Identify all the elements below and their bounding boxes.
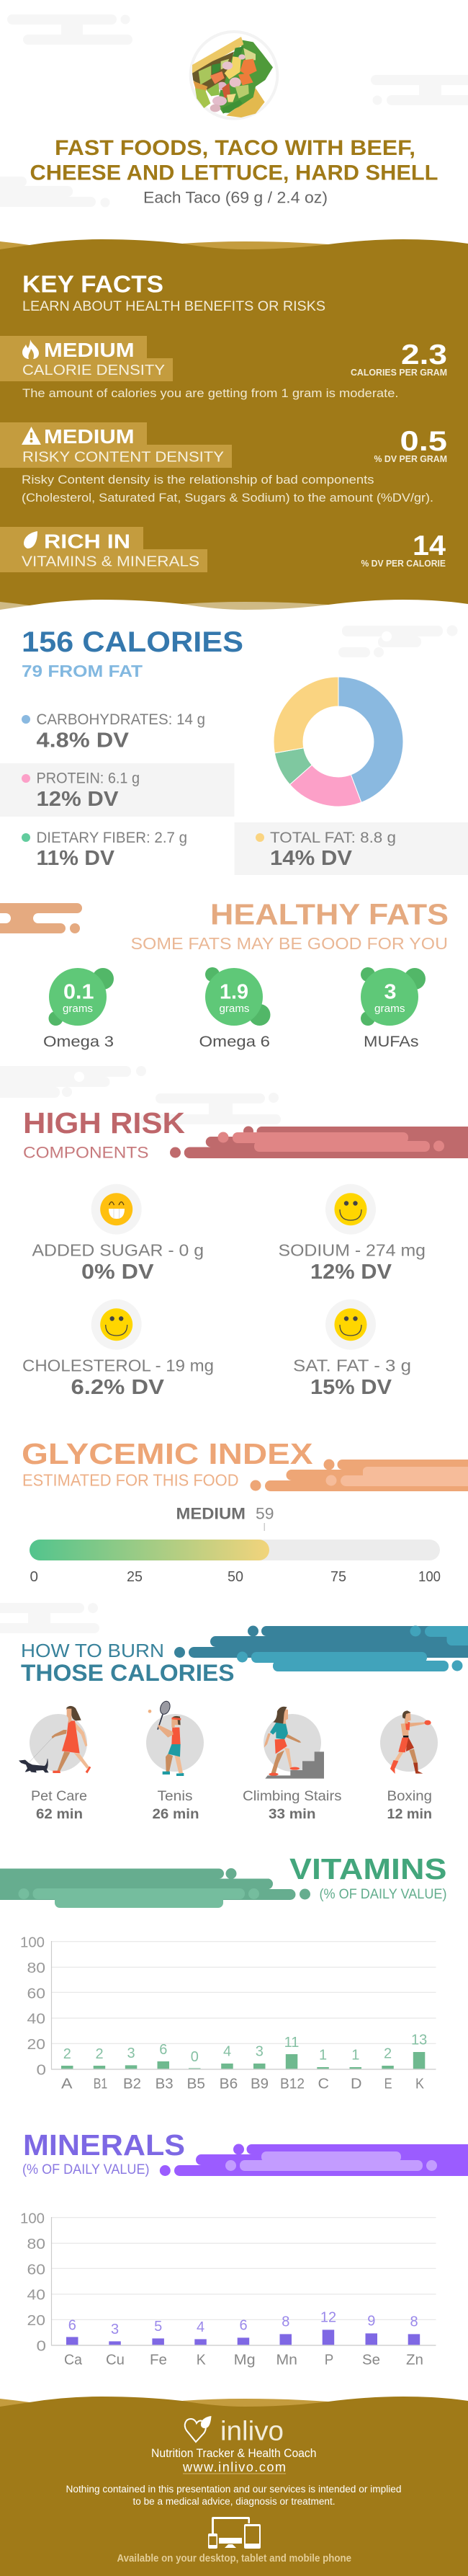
y axis labels <box>20 1935 46 2079</box>
x axis labels: Zn <box>406 2353 423 2368</box>
icon: flame <box>22 339 39 359</box>
y axis labels: 80 <box>27 1960 45 1976</box>
activity: tennis: 26 min <box>153 1806 199 1822</box>
icon: smiling face <box>334 1308 367 1341</box>
bar value labels: 12 <box>320 2310 336 2326</box>
stat: omega 6 <box>199 967 271 1050</box>
bars <box>61 2052 425 2069</box>
heading: vitamins: VITAMINS <box>289 1852 446 1886</box>
x axis labels: B2 <box>123 2076 141 2092</box>
availability note: Available on your desktop, tablet and mobile phone <box>117 2553 351 2564</box>
brand name: inlivo <box>220 2416 284 2446</box>
decorative blob: vitamins <box>0 1868 310 1908</box>
panel: glycemic index <box>22 1437 468 1585</box>
bar value labels: 2 <box>63 2046 71 2062</box>
decorative blob: glycemic <box>251 1459 468 1491</box>
fact: rich in vitamins and minerals <box>0 527 446 572</box>
subheading: (% OF DAILY VALUE) <box>22 2162 150 2177</box>
bar value labels: 6 <box>68 2317 76 2333</box>
x axis labels: Cu <box>106 2353 125 2368</box>
y axis labels: 0 <box>36 2337 46 2354</box>
gauge scale labels: 50 <box>228 1569 243 1585</box>
bar value labels: 11 <box>284 2035 299 2051</box>
x axis labels: C <box>318 2076 329 2092</box>
bar value labels: 3 <box>111 2322 119 2337</box>
macro: total fat: 14% DV <box>270 847 353 870</box>
component: added sugar: 0% DV <box>81 1261 154 1284</box>
bar value labels: 13 <box>411 2033 427 2048</box>
decorative cloud: top left <box>7 14 132 45</box>
bar value labels: 8 <box>410 2314 418 2329</box>
serving size subtitle: Each Taco (69 g / 2.4 oz) <box>143 189 328 206</box>
icon: smiling face <box>334 1193 367 1225</box>
heading: how to burn: HOW TO BURN <box>21 1640 164 1661</box>
fact: risky content density: % DV PER GRAM <box>374 453 447 464</box>
fact: calorie density: CALORIES PER GRAM <box>351 367 447 378</box>
component: cholesterol: 6.2% DV <box>71 1376 165 1399</box>
panel background wave <box>0 239 468 610</box>
bar value labels: 5 <box>154 2319 162 2335</box>
macro: protein <box>22 770 140 811</box>
gauge scale labels: 100 <box>418 1569 441 1585</box>
heading: high risk: HIGH RISK <box>23 1106 185 1140</box>
stat: omega 6: grams <box>219 1003 249 1015</box>
decorative blob: burn <box>174 1626 468 1671</box>
bar value labels: 1 <box>351 2048 359 2064</box>
gauge value label <box>176 1505 274 1531</box>
macro: total fat: TOTAL FAT: 8.8 g <box>270 830 396 846</box>
fact: calorie density: MEDIUM <box>44 339 134 361</box>
subheading: SOME FATS MAY BE GOOD FOR YOU <box>131 934 448 953</box>
title: CHEESE AND LETTUCE, HARD SHELL <box>30 161 438 185</box>
icon: warning triangle <box>22 427 41 445</box>
fact: rich in vitamins and minerals: % DV PER CALORIE <box>361 559 446 569</box>
component: cholesterol: CHOLESTEROL - 19 mg <box>22 1356 214 1375</box>
stat: omega 6: Omega 6 <box>199 1033 270 1050</box>
bar chart: vitamins <box>20 1935 436 2092</box>
panel: vitamins <box>0 1852 446 2092</box>
gauge value label: MEDIUM <box>176 1505 246 1522</box>
x axis labels: B1 <box>94 2076 107 2092</box>
icon: inlivo heart logo <box>185 2416 212 2442</box>
x axis labels: B6 <box>220 2076 238 2092</box>
illustration: woman climbing stairs <box>264 1707 324 1779</box>
activity: boxing: 12 min <box>387 1806 432 1822</box>
fact: calorie density <box>0 336 447 400</box>
panel: footer <box>0 2397 468 2576</box>
stat: omega 6: 1.9 <box>220 980 248 1003</box>
fact: risky content density: (Cholesterol, Saturated Fat, Sugars & Sodium) to the amount (%DV/gr). <box>22 492 433 505</box>
icon: leaf <box>24 531 37 548</box>
x axis labels: Ca <box>64 2353 83 2368</box>
macro: total fat <box>256 830 396 870</box>
heading: minerals: MINERALS <box>23 2128 185 2162</box>
bar value labels: 8 <box>282 2314 289 2330</box>
macro: carbohydrates: 4.8% DV <box>36 729 130 752</box>
activity: pet care: Pet Care <box>31 1788 87 1804</box>
bar value labels: 3 <box>256 2044 264 2060</box>
decorative blob: minerals <box>160 2144 468 2176</box>
y axis labels: 40 <box>27 2011 45 2027</box>
y axis labels: 60 <box>27 1985 45 2002</box>
bar value labels: 3 <box>127 2046 135 2061</box>
stat: omega 3: 0.1 <box>63 980 94 1003</box>
x axis labels: P <box>325 2353 333 2368</box>
macro: protein: PROTEIN: 6.1 g <box>36 770 140 787</box>
component: saturated fat: 15% DV <box>310 1376 392 1399</box>
macro: carbohydrates <box>22 711 205 752</box>
icon: smiling face <box>100 1308 132 1341</box>
bar value labels: 4 <box>223 2044 231 2060</box>
bar chart: minerals <box>20 2210 436 2368</box>
footer background wave <box>0 2397 468 2576</box>
macro: carbohydrates: CARBOHYDRATES: 14 g <box>36 711 205 728</box>
gauge value label: 59 <box>256 1505 274 1522</box>
fact: rich in vitamins and minerals: VITAMINS & MINERALS <box>22 554 199 569</box>
decorative cloud: above burn <box>0 1603 99 1633</box>
subheading: components: COMPONENTS <box>23 1143 148 1162</box>
subheading: LEARN ABOUT HEALTH BENEFITS OR RISKS <box>22 299 325 314</box>
bar value labels <box>68 2310 418 2337</box>
fact: calorie density: The amount of calories you are getting from 1 gram is moderate. <box>22 387 399 400</box>
panel: how to burn those calories <box>19 1626 468 1822</box>
decorative cloud: top right <box>371 75 468 105</box>
component: saturated fat <box>293 1300 411 1399</box>
x axis labels: B3 <box>156 2076 174 2092</box>
x axis labels: Fe <box>150 2353 167 2368</box>
x axis labels: B12 <box>280 2076 305 2092</box>
bar value labels: 9 <box>367 2314 375 2329</box>
illustration: boxer <box>380 1710 438 1774</box>
x axis labels: Mg <box>234 2353 256 2368</box>
x axis labels: E <box>384 2076 392 2092</box>
activity: pet care <box>19 1706 91 1822</box>
bar value labels: 0 <box>191 2049 199 2065</box>
x axis labels: Mn <box>276 2353 297 2368</box>
activity: boxing: Boxing <box>387 1788 432 1804</box>
x axis labels <box>61 2076 425 2092</box>
panel: healthy fats <box>0 898 449 1050</box>
food photo: taco <box>191 32 277 119</box>
disclaimer: Nothing contained in this presentation and our services is intended or implied <box>66 2484 402 2495</box>
y axis labels: 20 <box>27 2312 45 2329</box>
component: added sugar <box>32 1184 204 1284</box>
component: sodium <box>278 1184 426 1284</box>
gauge scale labels: 0 <box>30 1569 38 1585</box>
component: saturated fat: SAT. FAT - 3 g <box>293 1356 411 1375</box>
panel: high risk components <box>22 1106 468 1399</box>
tagline: Nutrition Tracker & Health Coach <box>151 2446 317 2460</box>
heading: 156 calories: 156 CALORIES <box>22 626 243 658</box>
y axis labels: 100 <box>20 2210 45 2226</box>
bar value labels: 2 <box>384 2046 392 2062</box>
stat: omega 3: grams <box>63 1003 93 1015</box>
highlight row backgrounds <box>0 763 468 875</box>
fact: risky content density: RISKY CONTENT DENSITY <box>22 448 224 466</box>
activity: boxing <box>380 1710 438 1822</box>
fact: rich in vitamins and minerals: 14 <box>413 530 446 561</box>
gauge bar <box>30 1540 440 1560</box>
bar value labels: 1 <box>319 2048 327 2064</box>
activity: climbing stairs <box>243 1707 342 1822</box>
activity: tennis <box>146 1700 204 1822</box>
macro: dietary fiber: DIETARY FIBER: 2.7 g <box>36 830 187 846</box>
decorative cloud: left of subtitle <box>0 177 109 208</box>
gauge scale labels: 75 <box>330 1569 346 1585</box>
x axis labels: B5 <box>187 2076 205 2092</box>
fact: risky content density <box>0 422 447 505</box>
bar value labels: 6 <box>159 2042 167 2058</box>
heading: key facts: KEY FACTS <box>22 271 163 297</box>
activity: tennis: Tenis <box>157 1788 193 1804</box>
fact: calorie density: 2.3 <box>401 339 447 370</box>
y axis labels: 40 <box>27 2287 45 2304</box>
illustration: woman walking dog <box>19 1706 91 1773</box>
bars <box>66 2329 420 2345</box>
icon: devices <box>208 2517 261 2549</box>
macro: dietary fiber: 11% DV <box>36 847 115 870</box>
fact: calorie density: CALORIE DENSITY <box>22 362 165 378</box>
stat: mufas: MUFAs <box>364 1033 419 1050</box>
icon: grinning face <box>100 1193 132 1225</box>
x axis labels: Se <box>362 2353 380 2368</box>
bar value labels: 6 <box>239 2318 248 2334</box>
panel: minerals <box>20 2128 468 2368</box>
panel bottom wave <box>0 600 468 643</box>
disclaimer: to be a medical advice, diagnosis or treatment. <box>132 2496 336 2507</box>
chart grid <box>51 2217 436 2345</box>
stat: omega 3: Omega 3 <box>43 1033 114 1050</box>
subheading: (% OF DAILY VALUE) <box>320 1886 446 1902</box>
decorative cloud: calories <box>338 626 458 657</box>
macro: dietary fiber <box>22 830 187 870</box>
x axis labels <box>64 2353 423 2368</box>
stat: mufas: 3 <box>384 980 396 1003</box>
stat: omega 3 <box>43 968 114 1050</box>
fact: risky content density: MEDIUM <box>44 425 134 448</box>
activity: climbing stairs: Climbing Stairs <box>243 1788 342 1804</box>
component: added sugar: ADDED SUGAR - 0 g <box>32 1241 204 1260</box>
y axis labels: 0 <box>36 2061 46 2079</box>
heading: glycemic index: GLYCEMIC INDEX <box>22 1437 313 1470</box>
bar value labels: 4 <box>197 2319 204 2335</box>
bar value labels <box>63 2033 427 2065</box>
stat: mufas: grams <box>374 1003 405 1015</box>
y axis labels: 20 <box>27 2036 45 2053</box>
y axis labels: 100 <box>20 1935 45 1950</box>
y axis labels <box>20 2210 46 2354</box>
component: sodium: 12% DV <box>310 1261 392 1284</box>
decorative clouds: above high risk <box>0 1066 281 1124</box>
subheading: ESTIMATED FOR THIS FOOD <box>22 1470 239 1489</box>
donut chart <box>274 677 403 807</box>
component: cholesterol <box>22 1300 214 1399</box>
activity: pet care: 62 min <box>36 1806 83 1822</box>
stat: mufas <box>361 967 426 1050</box>
x axis labels: K <box>197 2353 206 2368</box>
gauge scale labels <box>30 1569 441 1585</box>
subheading: from fat: 79 FROM FAT <box>22 662 143 680</box>
y axis labels: 80 <box>27 2236 45 2252</box>
title: FAST FOODS, TACO WITH BEEF, <box>55 136 415 160</box>
fact: risky content density: Risky Content density is the relationship of bad components <box>22 474 374 487</box>
decorative blob: healthy fats <box>0 903 82 933</box>
x axis labels: D <box>351 2076 361 2092</box>
illustration: tennis player <box>146 1700 204 1776</box>
website link: www.inlivo.com <box>182 2460 286 2474</box>
decorative blob: high risk <box>170 1126 468 1158</box>
title <box>30 136 438 185</box>
activity: climbing stairs: 33 min <box>269 1806 315 1822</box>
chart grid <box>51 1941 436 2069</box>
heading: healthy fats: HEALTHY FATS <box>210 898 449 931</box>
x axis labels: A <box>61 2076 73 2092</box>
y axis labels: 60 <box>27 2261 45 2278</box>
x axis labels: B9 <box>251 2076 269 2092</box>
fact: risky content density: 0.5 <box>400 426 447 457</box>
gauge scale labels: 25 <box>127 1569 143 1585</box>
bar value labels: 2 <box>95 2046 104 2062</box>
x axis labels: K <box>415 2076 425 2092</box>
panel: key facts <box>0 239 468 643</box>
heading: those calories: THOSE CALORIES <box>21 1660 235 1686</box>
disclaimer <box>66 2484 402 2507</box>
component: sodium: SODIUM - 274 mg <box>278 1241 426 1260</box>
fact: rich in vitamins and minerals: RICH IN <box>44 530 130 552</box>
macro: protein: 12% DV <box>36 788 119 811</box>
panel: calories <box>0 626 468 875</box>
